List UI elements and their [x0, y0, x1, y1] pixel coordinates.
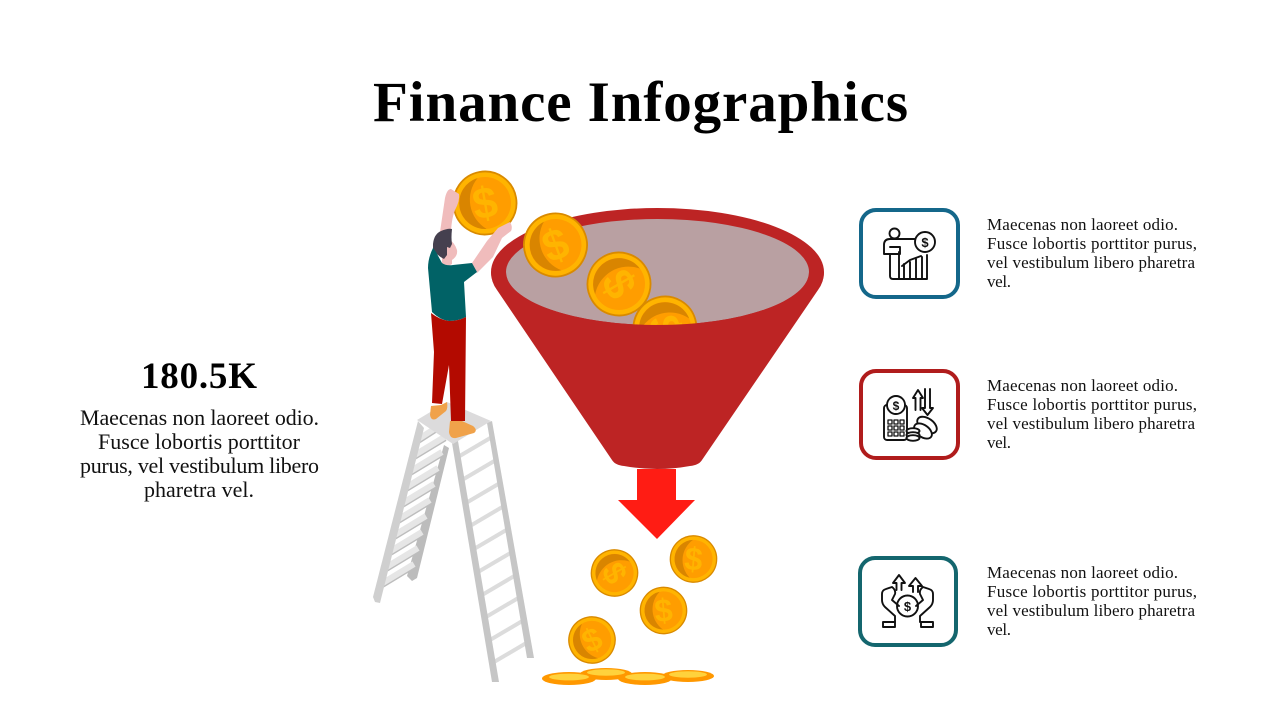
item 2 — [861, 371, 1197, 458]
stat block: 180.5K — [80, 356, 319, 502]
coins on the ground — [542, 668, 714, 685]
text block 1: vel. — [987, 272, 1011, 291]
stat description — [80, 405, 319, 502]
back ladder frame — [373, 421, 449, 603]
funnel — [491, 208, 824, 469]
text block 2: Fusce lobortis porttitor purus, — [987, 395, 1197, 414]
item 1 — [861, 210, 1197, 297]
funnel body — [491, 272, 824, 469]
title: Finance Infographics — [373, 71, 908, 134]
right arm — [472, 222, 512, 273]
coin 3: $ — [591, 261, 646, 307]
shirt — [428, 248, 477, 321]
icon: investor with chart — [884, 228, 935, 279]
falling coin 3: $ — [653, 592, 674, 629]
coin falling into funnel — [626, 289, 704, 367]
coin 2: $ — [536, 218, 576, 273]
falling coin 4 — [561, 609, 623, 671]
ladder — [373, 402, 534, 682]
stat description: pharetra vel. — [144, 477, 254, 502]
text block 2: vel. — [987, 433, 1011, 452]
falling coin 3 — [638, 585, 689, 636]
icon: calculator and coins — [884, 389, 940, 442]
neck and face — [442, 237, 457, 266]
back foot — [430, 402, 447, 420]
icon card 1 — [861, 210, 958, 297]
falling coin 1 — [583, 541, 646, 605]
text block 1: Maecenas non laoreet odio. — [987, 215, 1178, 234]
coin 3 — [576, 241, 662, 327]
item 3 — [860, 558, 1197, 645]
icon: hands with rising coin — [882, 575, 933, 627]
arrow down — [618, 469, 695, 539]
funnel rim — [491, 208, 824, 336]
text block 3: Fusce lobortis porttitor purus, — [987, 582, 1197, 601]
text block 1: Fusce lobortis porttitor purus, — [987, 234, 1197, 253]
text block 2 — [987, 376, 1197, 452]
left arm — [440, 189, 459, 236]
icon card 3 — [860, 558, 956, 645]
falling coin 4: $ — [576, 620, 608, 660]
falling coin 2: $ — [683, 540, 704, 578]
icon: investor with chart: $ — [921, 235, 929, 250]
falling coin 2 — [668, 534, 719, 584]
text block 3: vel. — [987, 620, 1011, 639]
falling coin 1: $ — [594, 556, 635, 590]
text block 3 — [987, 563, 1197, 639]
stat description: Maecenas non laoreet odio. — [80, 405, 319, 430]
icon: calculator and coins: $ — [893, 399, 900, 413]
text block 3: Maecenas non laoreet odio. — [987, 563, 1178, 582]
trousers — [431, 313, 466, 421]
text block 2: vel vestibulum libero pharetra — [987, 414, 1195, 433]
ladder platform — [417, 402, 491, 444]
hair — [433, 229, 452, 259]
text block 1: vel vestibulum libero pharetra — [987, 253, 1195, 272]
person — [428, 189, 512, 438]
stat description: purus, vel vestibulum libero — [80, 453, 319, 478]
front ladder rails — [452, 421, 534, 682]
coin held by person — [449, 167, 521, 239]
stat description: Fusce lobortis porttitor — [98, 429, 301, 454]
coin held by person: $ — [469, 177, 501, 230]
stat value: 180.5K — [141, 356, 257, 397]
funnel opening — [506, 219, 809, 325]
icon card 2 — [861, 371, 958, 458]
coin 2 — [515, 205, 596, 285]
front ladder rungs — [458, 437, 528, 662]
text block 2: Maecenas non laoreet odio. — [987, 376, 1178, 395]
text block 3: vel vestibulum libero pharetra — [987, 601, 1195, 620]
front foot — [449, 421, 476, 438]
text block 1 — [987, 215, 1197, 291]
coin falling into funnel: $ — [638, 310, 691, 346]
icon: hands with rising coin: $ — [904, 599, 912, 614]
